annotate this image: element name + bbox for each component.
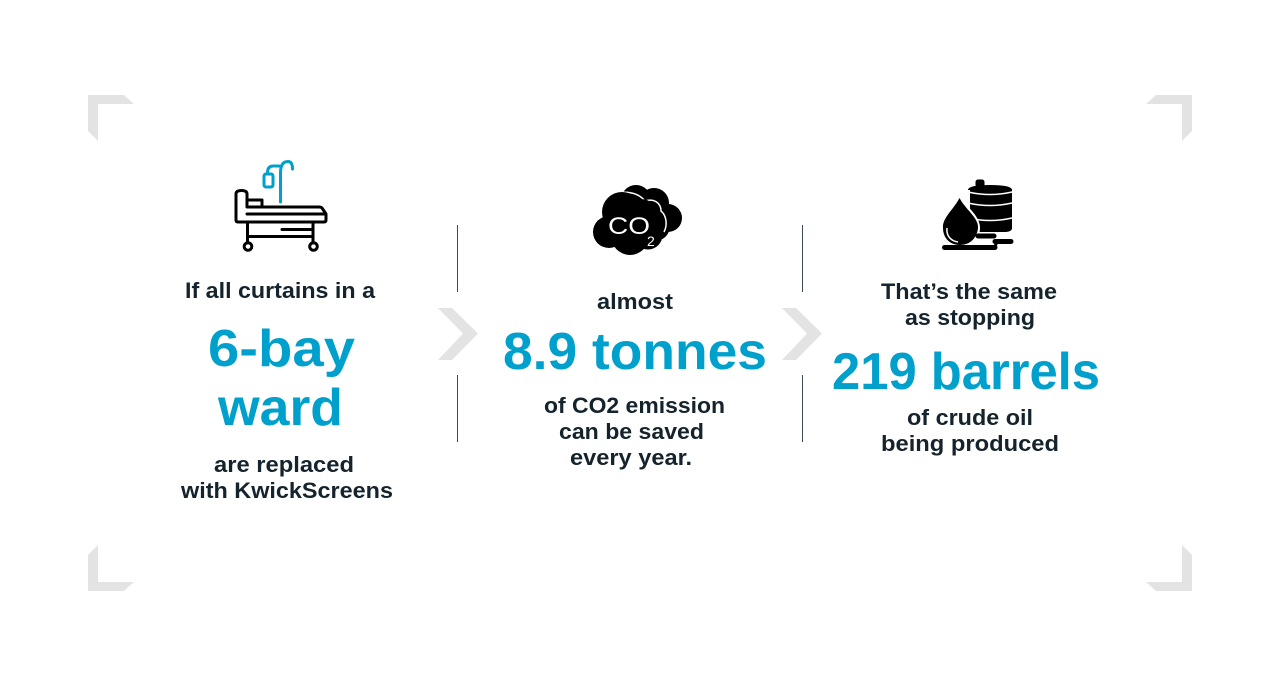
stat: 6-bay ward (208, 320, 355, 437)
text: replaced with KwickScreens: with KwickScreens (180, 478, 393, 503)
text: crude oil being produced: being produced (881, 431, 1059, 456)
arrow: second chevron (782, 308, 822, 360)
frame corner: bottom left (88, 545, 134, 591)
panel: crude oil (832, 180, 1100, 456)
text: if all curtains: If all curtains in a (185, 278, 376, 303)
frame corner: top right (1146, 95, 1192, 141)
text: crude oil being produced: of crude oil (907, 405, 1033, 430)
arrow: first chevron (438, 308, 478, 360)
text: crude oil being produced (881, 405, 1059, 456)
text: same as stopping: as stopping (905, 305, 1035, 330)
text: of CO2 emission: can be saved (559, 419, 704, 444)
text: same as stopping (881, 279, 1057, 330)
stat: 6-bay ward: ward (217, 379, 343, 437)
icon: oil barrel and drop (941, 180, 1012, 248)
text: of CO2 emission: of CO2 emission (544, 393, 725, 418)
text: same as stopping: That’s the same (881, 279, 1057, 304)
text: almost: almost (597, 289, 674, 314)
stat: 6-bay ward: 6-bay (208, 320, 355, 378)
text: replaced with KwickScreens: are replaced (214, 452, 354, 477)
divider with arrow: first (438, 225, 478, 442)
icon: CO2 cloud (593, 185, 682, 255)
icon: CO2 cloud: CO (608, 213, 650, 240)
panel: CO2 saved (503, 185, 767, 470)
icon: hospital bed with drip (236, 162, 326, 250)
stat: 8.9 tonnes: 8.9 tonnes (503, 323, 767, 381)
icon: CO2 cloud: 2 (647, 233, 655, 249)
divider with arrow: second (782, 225, 822, 442)
text: of CO2 emission: every year. (570, 445, 692, 470)
text: replaced with KwickScreens (180, 452, 393, 503)
panel: hospital ward (180, 162, 393, 503)
frame corner: bottom right (1146, 545, 1192, 591)
frame corner: top left (88, 95, 134, 141)
stat: 219 barrels: 219 barrels (832, 343, 1100, 401)
text: of CO2 emission (544, 393, 725, 470)
